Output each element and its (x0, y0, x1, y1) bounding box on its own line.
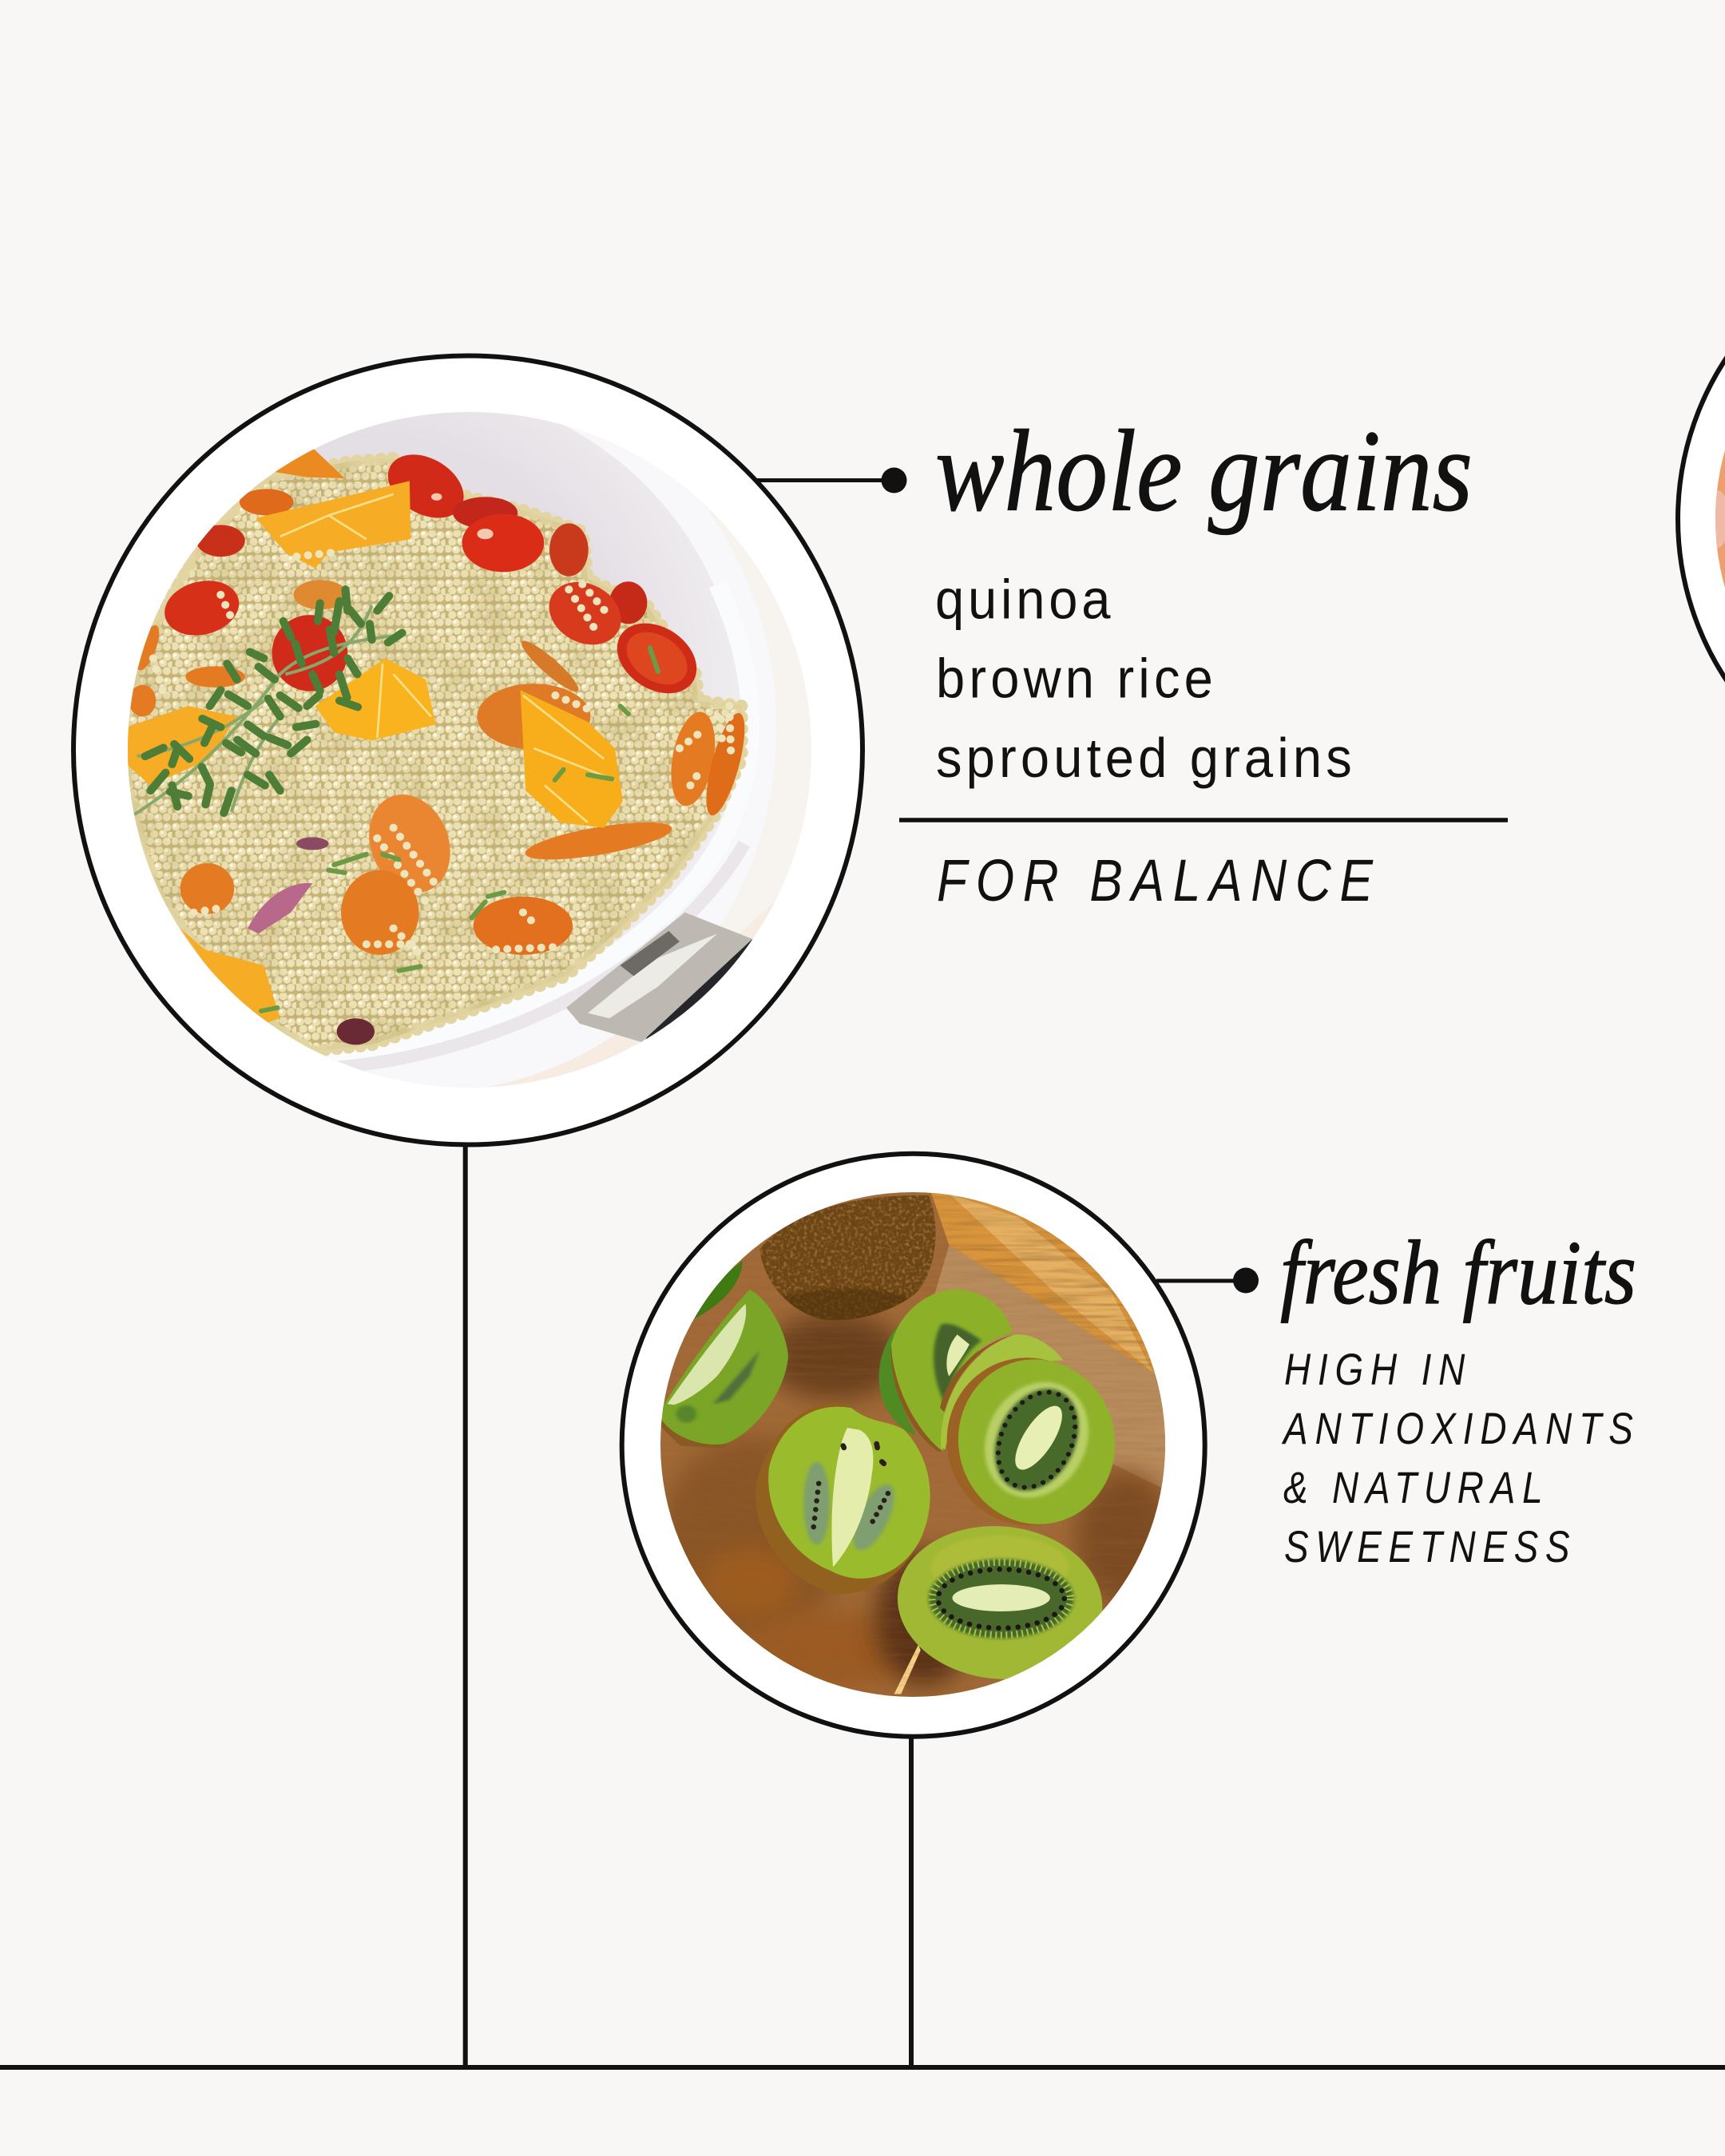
whole grains heading: whole grains (935, 406, 1473, 535)
fresh fruits photo circle (622, 1154, 1205, 1737)
wedge kiwi (660, 1290, 788, 1449)
onion (248, 883, 312, 933)
handle (566, 913, 752, 1042)
divider rule (899, 818, 1508, 822)
middle half kiwi (755, 1403, 930, 1594)
tomatoes (158, 442, 710, 707)
fresh fruits description: SWEETNESS (1284, 1522, 1570, 1571)
background green sliver (695, 1261, 743, 1318)
whole grains list: quinoa (935, 569, 1111, 631)
quinoa grains scattered over toppings (153, 553, 731, 955)
whole kiwi (758, 1194, 939, 1329)
table and board (648, 1182, 1177, 1706)
whole grains list: brown rice (936, 648, 1213, 710)
carrots (129, 489, 752, 955)
bottom slice (890, 1516, 1110, 1689)
whole grains connector line and dot (757, 468, 907, 493)
timeline: vertical stems and baseline (0, 1142, 1725, 2067)
whole grains list: sprouted grains (936, 727, 1352, 790)
whole grains photo circle (67, 356, 862, 1145)
large slice (934, 1345, 1128, 1539)
fresh fruits description: ANTIOXIDANTS (1281, 1404, 1633, 1453)
FOR BALANCE caption: FOR BALANCE (937, 848, 1374, 914)
fresh fruits description: & NATURAL (1283, 1463, 1543, 1512)
fresh fruits description (1281, 1345, 1633, 1571)
quinoa mass (124, 457, 744, 1056)
photo: sliced kiwis on a wood board (648, 1182, 1177, 1706)
fresh fruits description: HIGH IN (1284, 1345, 1465, 1394)
fresh fruits heading: fresh fruits (1280, 1222, 1636, 1323)
thyme sprig (134, 589, 658, 1011)
right cropped food circle (1675, 356, 1725, 682)
orange slices (126, 448, 623, 1024)
whole grains list (935, 569, 1352, 790)
photo: quinoa salad in white bowl (128, 412, 811, 1088)
infographic canvas (0, 353, 1725, 2070)
rear slices (879, 1290, 1063, 1452)
fresh fruits connector line and dot (1156, 1268, 1259, 1294)
